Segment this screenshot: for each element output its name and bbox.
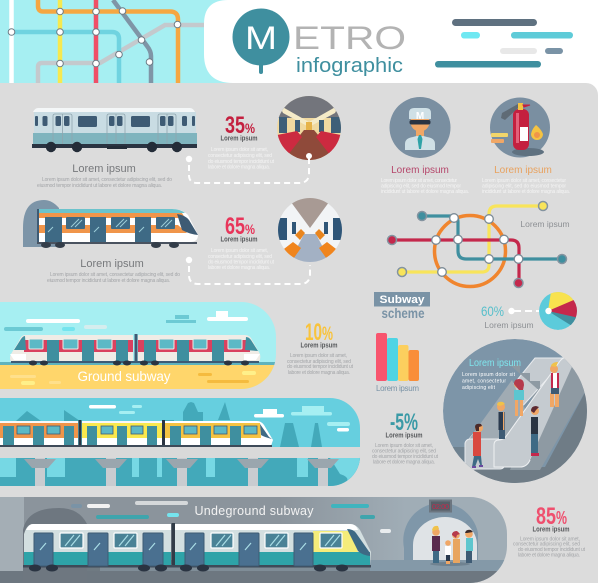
tunnel arch xyxy=(403,503,478,560)
escalator circle xyxy=(443,339,587,483)
person: man in dark top xyxy=(531,406,539,456)
person: woman in teal xyxy=(514,379,524,416)
deck and pillars xyxy=(0,447,360,486)
stat: 85% xyxy=(513,503,586,558)
clouds xyxy=(4,311,248,331)
stat: 35%: Lorem ipsum dolor sit amet, xyxy=(211,147,268,153)
stat: 35%: consectetur adipiscing elit, sed xyxy=(208,153,272,159)
icon: carriage interior circle xyxy=(277,96,341,160)
icon: driver circle xyxy=(390,97,450,158)
clouds xyxy=(89,405,350,432)
stat: 65%: 65 xyxy=(225,213,245,240)
caption: driver: incididunt ut labore et dolore magna aliqua. xyxy=(381,189,469,195)
stat: 10%: labore et dolore magna aliqua. xyxy=(288,370,350,376)
escalator text: adipiscing elit xyxy=(462,385,496,391)
caption: driver xyxy=(381,165,469,195)
icon: driver circle: M xyxy=(416,111,424,122)
stat: 85%: do eiusmod tempor incididunt ut xyxy=(518,547,586,553)
person: man in red xyxy=(472,424,483,468)
stat: -5%: Lorem ipsum xyxy=(386,432,422,440)
stat: 10%: Lorem ipsum dolor sit amet, xyxy=(290,353,347,359)
stat: 85%: % xyxy=(556,508,567,528)
stat: 85%: consectetur adipiscing elit, sed xyxy=(513,542,580,548)
subway map header xyxy=(0,0,240,83)
decorative header bars xyxy=(435,19,573,68)
pie chart xyxy=(539,292,577,330)
person: blond man xyxy=(497,402,505,439)
heading: subway scheme xyxy=(374,292,430,321)
caption: train 1 xyxy=(37,163,172,189)
stat: 65%: % xyxy=(245,221,255,237)
icon: fire extinguisher circle xyxy=(490,98,550,158)
heading: ground subway: Ground subway xyxy=(78,369,171,384)
stat: 60% with pie: Lorem ipsum xyxy=(484,320,534,330)
caption: train 2: eiusmod tempor incididunt ut labore et dolore magna aliqua. xyxy=(47,278,170,284)
stat: -5% xyxy=(372,409,439,466)
train 1 xyxy=(32,108,197,152)
caption: driver: Lorem ipsum dolor sit amet, consectetur xyxy=(381,178,457,184)
clock sign xyxy=(429,500,452,512)
escalator text xyxy=(462,358,521,391)
dashed connector 2 xyxy=(186,257,310,284)
title blob xyxy=(204,0,600,83)
heading: subway scheme: scheme xyxy=(382,305,425,321)
panel: ground subway xyxy=(0,302,276,389)
stat: 10%: consectetur adipiscing elit, sed xyxy=(287,359,351,365)
heading: subway scheme: Subway xyxy=(380,294,425,306)
stat: 85%: labore et dolore magna aliqua. xyxy=(518,552,580,558)
train 2 with tunnel xyxy=(23,200,198,248)
person: man in white vest xyxy=(550,362,559,407)
stat: 10%: % xyxy=(322,324,333,345)
escalator text: Lorem ipsum dolor sit xyxy=(462,372,516,378)
tunnel left xyxy=(23,508,87,571)
escalator xyxy=(465,357,590,470)
stat: 65%: Lorem ipsum xyxy=(220,236,258,244)
stat: 35%: 35 xyxy=(225,112,245,139)
caption: driver: adipiscing elit, sed do eiusmod tempor xyxy=(381,184,461,190)
title: ETRO xyxy=(293,20,406,56)
stat: 65%: Lorem ipsum dolor sit amet, xyxy=(211,248,268,254)
caption: driver: Lorem ipsum xyxy=(391,165,449,176)
stat: -5%: Lorem ipsum dolor sit amet, xyxy=(375,443,433,449)
stat: 10%: 10 xyxy=(305,319,322,346)
stat: 10%: do eiusmod tempor incididunt ut xyxy=(287,364,354,370)
caption: safety: incididunt ut labore et dolore magna aliqua. xyxy=(482,189,570,195)
panel: underground subway xyxy=(0,497,507,583)
train: ground xyxy=(10,334,260,366)
title: infographic xyxy=(296,55,403,77)
stat: 65%: do eiusmod tempor incididunt ut xyxy=(208,260,275,266)
heading: underground subway: Undeground subway xyxy=(194,504,314,518)
stat: 60% with pie xyxy=(482,292,577,330)
panel: elevated subway xyxy=(0,398,360,486)
caption: safety: Lorem ipsum xyxy=(494,165,552,176)
caption: train 2 xyxy=(47,258,180,284)
stat: 10%: Lorem ipsum xyxy=(300,342,338,350)
stat: 85%: 85 xyxy=(536,503,556,530)
stat: -5%: labore et dolore magna aliqua. xyxy=(373,460,435,466)
stat: 35%: % xyxy=(245,120,255,136)
stat: 35%: Lorem ipsum xyxy=(220,136,258,142)
stat: -5%: consectetur adipiscing elit, sed xyxy=(372,448,436,454)
bar chart xyxy=(376,333,419,393)
train: elevated xyxy=(0,420,273,447)
streaks xyxy=(71,501,391,533)
stat: 65% xyxy=(208,213,275,271)
stat: 10% xyxy=(287,319,354,376)
clock sign: 02:00 xyxy=(432,502,449,511)
dashed connector 1 xyxy=(186,153,312,183)
stat: 35% xyxy=(208,112,275,170)
stat: 65%: consectetur adipiscing elit, sed xyxy=(208,254,272,260)
caption: safety: Lorem ipsum dolor sit amet, consectetur xyxy=(482,178,566,184)
stat: 60% with pie: 60% xyxy=(481,304,504,319)
stat: 35%: labore et dolore magna aliqua. xyxy=(208,164,270,170)
train: underground xyxy=(23,523,371,572)
caption: train 2: Lorem ipsum xyxy=(80,258,144,270)
escalator text: amet, consectetur xyxy=(462,378,506,384)
stat: -5%: -5% xyxy=(390,409,418,436)
stat: 85%: Lorem ipsum xyxy=(532,526,570,534)
caption: safety: adipiscing elit, sed do eiusmod tempor xyxy=(482,184,566,190)
escalator text: Lorem ipsum xyxy=(469,358,521,369)
caption: train 2: Lorem ipsum dolor sit amet, consectetur adipiscing elit, sed do xyxy=(50,272,180,278)
subway scheme map xyxy=(388,202,566,288)
city skyline xyxy=(0,402,360,486)
bar chart: Lorem ipsum xyxy=(376,384,419,393)
stat: 35%: do eiusmod tempor incididunt ut xyxy=(208,159,275,165)
caption: safety xyxy=(482,165,570,195)
stat: -5%: do eiusmod tempor incididunt ut xyxy=(372,454,439,460)
icon: metro pin: M xyxy=(245,20,277,56)
caption: train 1: eiusmod tempor incididunt ut labore et dolore magna aliqua. xyxy=(37,183,162,189)
scheme label: Lorem ipsum xyxy=(520,219,570,229)
title xyxy=(232,8,406,77)
caption: train 1: Lorem ipsum xyxy=(72,163,136,175)
sand strokes xyxy=(10,371,256,385)
stat: 65%: labore et dolore magna aliqua. xyxy=(208,265,270,271)
people waiting xyxy=(430,526,473,566)
icon: tunnel car interior circle xyxy=(278,198,342,263)
caption: train 1: Lorem ipsum dolor sit amet, consectetur adipiscing elit, sed do xyxy=(42,177,172,183)
stat: 85%: Lorem ipsum dolor sit amet, xyxy=(520,536,580,542)
icon: metro pin xyxy=(232,8,290,74)
